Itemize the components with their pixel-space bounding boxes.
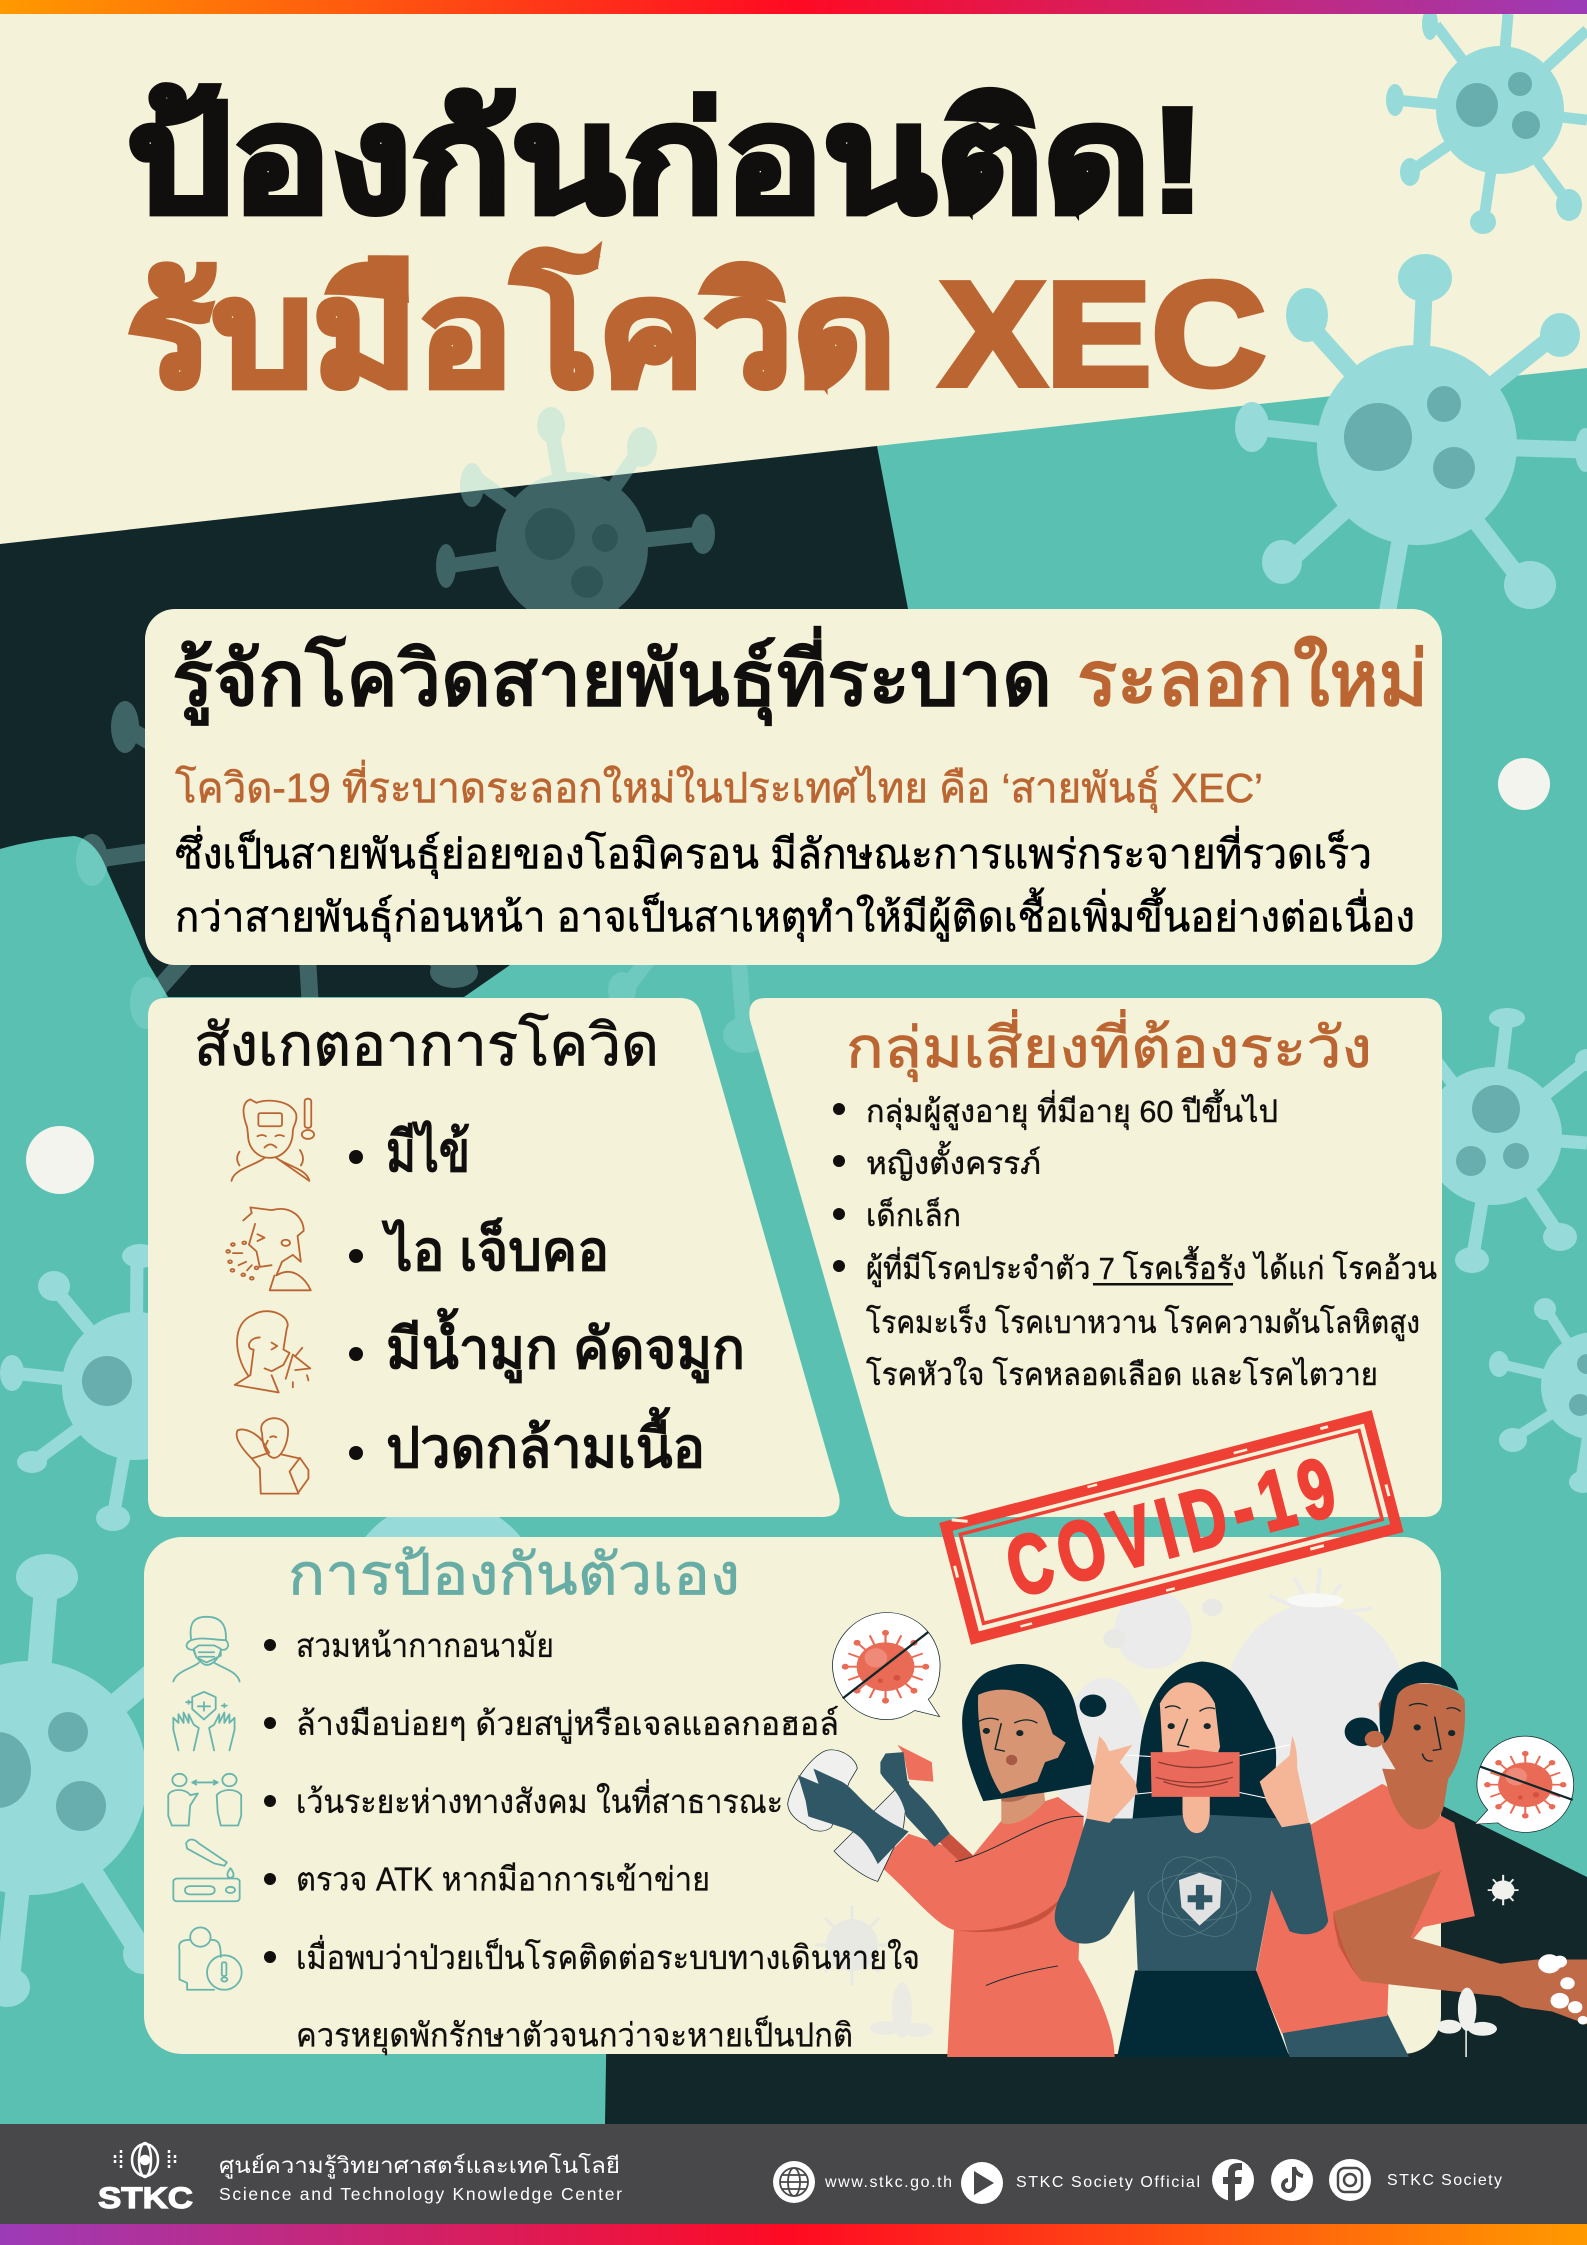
icon: globe: [773, 2161, 815, 2203]
icon: tiktok: [1271, 2159, 1313, 2201]
virus large right: [1235, 254, 1587, 620]
bullet: [349, 1347, 363, 1361]
person 2: sweater: [1055, 1814, 1328, 1970]
bottom gradient bar: [0, 2224, 1587, 2245]
spray bottle and cloth: [788, 1745, 950, 1881]
bubble right: [1475, 1736, 1574, 1832]
faint plant: [870, 1982, 933, 2038]
icon: facebook: [1212, 2159, 1254, 2201]
faded virus behind intro panel left: [76, 701, 478, 1029]
prevention item 3: เว้นระยะห่างทางสังคม ในที่สาธารณะ: [296, 1779, 783, 1820]
bullet: [264, 1717, 276, 1729]
risk item 3: เด็กเล็ก: [866, 1197, 961, 1233]
bullet: [264, 1873, 276, 1885]
icon: social distance: [168, 1774, 241, 1825]
title line 2: รับมือโควิด XEC: [127, 248, 1266, 417]
risk item 1: กลุ่มผู้สูงอายุ ที่มีอายุ 60 ปีขึ้นไป: [866, 1089, 1278, 1131]
icon: muscle pain: [237, 1418, 308, 1494]
stamp text: COVID-19: [997, 1440, 1345, 1615]
soap foam: [1538, 1954, 1587, 2025]
panel: risk groups: [749, 998, 1442, 1517]
icon: ATK test: [173, 1840, 240, 1901]
small white virus: [1488, 1875, 1519, 1905]
bullet: [264, 1639, 276, 1651]
symptom: runny nose: มีน้ำมูก คัดจมูก: [386, 1308, 745, 1384]
logo wordmark: STKC: [98, 2182, 193, 2215]
prevention heading: การป้องกันตัวเอง: [288, 1543, 740, 1607]
person 2: [1055, 1662, 1328, 2057]
footer bar: [0, 2124, 1587, 2224]
virus left lower: [0, 1244, 210, 1531]
youtube name: STKC Society Official: [1016, 2174, 1200, 2191]
person 1: back hair: [962, 1664, 1096, 1801]
intro heading orange: ระลอกใหม่: [1077, 635, 1428, 722]
person 2: mask: [1151, 1749, 1240, 1797]
faded virus behind intro panel right: [608, 750, 830, 1053]
person 2: neck: [1182, 1792, 1210, 1833]
prevention item 4: ตรวจ ATK หากมีอาการเข้าข่าย: [296, 1860, 710, 1898]
icon: fever: [231, 1099, 314, 1181]
person 3: neck and head: [1382, 1769, 1449, 1829]
person 1: face: [978, 1690, 1066, 1794]
symptom: muscle pain: ปวดกล้ามเนื้อ: [386, 1407, 705, 1479]
person 1: dress: [878, 1664, 1115, 2057]
white plant: [1437, 1988, 1497, 2057]
faded virus: centre: [436, 407, 715, 680]
panel: intro: [145, 609, 1442, 965]
faint virus behind text: [815, 1905, 889, 1985]
symptom: fever: มีไข้: [386, 1119, 470, 1183]
person 2: face: [1160, 1682, 1220, 1769]
person 2: hair: [1133, 1662, 1277, 1820]
panel: symptoms: [148, 998, 840, 1517]
dark bottom shape: [605, 1805, 1587, 2124]
symptoms heading: สังเกตอาการโควิด: [194, 1012, 659, 1078]
risk underline: [1093, 1283, 1233, 1286]
risk item 4 line 2: โรคมะเร็ง โรคเบาหวาน โรคความดันโลหิตสูง: [866, 1304, 1420, 1341]
teal background shape: [0, 368, 1587, 2124]
icon: sick person: [179, 1927, 242, 1990]
icon: mask: [173, 1617, 240, 1682]
person 2: skirt: [1117, 1970, 1290, 2057]
virus bottom left: [0, 1554, 170, 2007]
person 2: hands: [1086, 1736, 1138, 1823]
bullet: [264, 1795, 276, 1807]
COVID-19 stamp: [941, 1410, 1400, 1642]
virus top right: [1386, 8, 1587, 234]
bullet: [349, 1150, 363, 1164]
virus right middle: [1420, 1008, 1587, 1273]
intro line 3: กว่าสายพันธุ์ก่อนหน้า อาจเป็นสาเหตุทำให้มีผู้ติดเชื้อเพิ่มขึ้นอย่างต่อเนื่อง: [175, 887, 1415, 942]
stamp wear specks: [941, 1410, 1400, 1642]
icon: runny nose: [235, 1311, 310, 1392]
icon: hand wash: [173, 1692, 235, 1750]
person 2: atom and shield emblem: [1147, 1846, 1252, 1947]
footer organisation Thai: ศูนย์ความรู้วิทยาศาสตร์และเทคโนโลยี: [219, 2153, 620, 2179]
white dot right: [1498, 758, 1550, 810]
website: www.stkc.go.th: [824, 2174, 952, 2191]
risk item 4: ผู้ที่มีโรคประจำตัว 7 โรคเรื้อรัง ได้แก่ โรคอ้วน: [866, 1246, 1437, 1287]
risk heading: กลุ่มเสี่ยงที่ต้องระวัง: [846, 1009, 1372, 1082]
white dot left: [26, 1126, 94, 1194]
footer logo: [98, 2143, 193, 2215]
intro heading black: รู้จักโควิดสายพันธุ์ที่ระบาด: [172, 625, 1052, 727]
instagram name: STKC Society: [1387, 2172, 1502, 2189]
small faint viruses: [1103, 1599, 1223, 1648]
risk bullets: [833, 1103, 845, 1272]
panel: prevention: [144, 1537, 1441, 2056]
person 3: shirt and trousers: [1256, 1662, 1587, 2057]
virus right lower: [1489, 1298, 1587, 1493]
bullet: [349, 1446, 363, 1460]
symptom: cough: ไอ เจ็บคอ: [381, 1216, 609, 1282]
person 3: arm: [1333, 1871, 1587, 2025]
top gradient bar: [0, 0, 1587, 14]
bullet: [349, 1249, 363, 1263]
illustration: three people with masks: [788, 1567, 1587, 2057]
prevention item 2: ล้างมือบ่อยๆ ด้วยสบู่หรือเจลแอลกอฮอล์: [296, 1705, 839, 1744]
intro line 2: ซึ่งเป็นสายพันธุ์ย่อยของโอมิครอน มีลักษณะการแพร่กระจายที่รวดเร็ว: [175, 826, 1372, 879]
risk item 4 line 3: โรคหัวใจ โรคหลอดเลือด และโรคไตวาย: [866, 1357, 1378, 1392]
icon: play: [961, 2162, 1003, 2204]
prevention item 5 line 2: ควรหยุดพักรักษาตัวจนกว่าจะหายเป็นปกติ: [296, 2016, 853, 2056]
footer organisation English: Science and Technology Knowledge Center: [219, 2184, 622, 2204]
virus behind prevention panel: [343, 1500, 543, 1700]
icon: cough: [226, 1207, 311, 1290]
dark background shape: [0, 446, 908, 997]
icon: instagram: [1329, 2159, 1371, 2201]
intro line 1: โควิด-19 ที่ระบาดระลอกใหม่ในประเทศไทย คือ ‘สายพันธุ์ XEC’: [175, 760, 1263, 813]
logo emblem: [115, 2143, 175, 2177]
bubble left: [832, 1613, 940, 1720]
title line 1: ป้องกันก่อนติด!: [127, 78, 1205, 243]
bullet: [264, 1951, 276, 1963]
gloves: [798, 1769, 909, 1864]
prevention item 5: เมื่อพบว่าป่วยเป็นโรคติดต่อระบบทางเดินหายใจ: [296, 1935, 920, 1976]
person 1: neck: [1001, 1777, 1045, 1824]
prevention item 1: สวมหน้ากากอนามัย: [296, 1627, 554, 1664]
grey background shapes: [1058, 1567, 1408, 1860]
risk item 2: หญิงตั้งครรภ์: [866, 1141, 1041, 1181]
